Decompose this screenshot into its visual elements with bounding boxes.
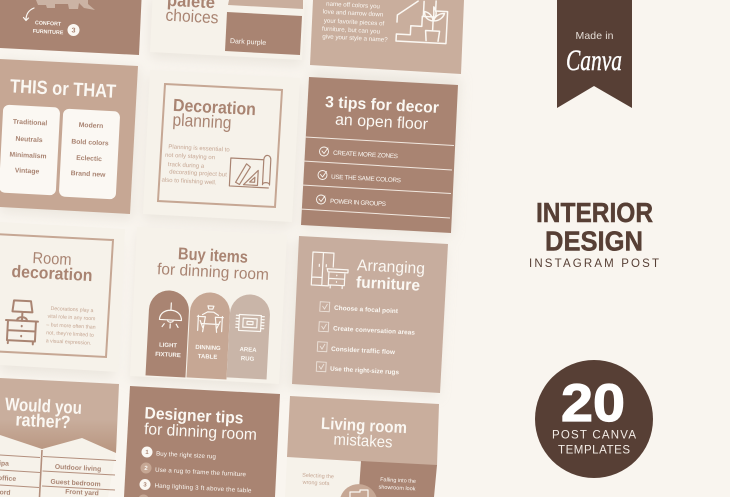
panel: designer tips: Use a rug to frame the furniture: [155, 467, 247, 478]
panel: designer tips: 1: [145, 450, 149, 456]
panel: buy items: RUG: [241, 356, 255, 363]
panel: designer tips: 3: [143, 482, 147, 489]
panel: room decoration: Decorations play a: [50, 306, 94, 314]
icon: blueprint and ruler: [229, 154, 271, 188]
icon: nightstand with lamp: [5, 300, 39, 345]
panel: arranging furniture: Choose a focal point: [334, 305, 399, 315]
heading: living room mistakes: Living room: [321, 415, 407, 437]
panel: this or that: [0, 59, 138, 214]
heading: room decoration: Room: [32, 250, 72, 269]
panel: buy items: TABLE: [198, 354, 217, 361]
panel: would you rather: rather?: [15, 410, 71, 432]
panel: 3 tips for decor: [300, 77, 458, 233]
icon: wardrobe and drawers: [311, 252, 349, 289]
badge: 20 post canva templates: POST CANVA: [552, 430, 636, 442]
heading: decoration planning: Decoration: [173, 95, 256, 119]
panel: 3 tips for decor: USE THE SAME COLORS: [331, 174, 401, 184]
panel: living room mistakes: showroom look: [378, 485, 416, 492]
panel: palette choices: Dark purple: [230, 38, 266, 47]
panel: room decoration: not, they're limited to: [46, 330, 94, 339]
ribbon: made in canva: [557, 0, 632, 108]
panel: 3 tips for decor: POWER IN GROUPS: [330, 198, 386, 208]
panel: comfort furniture card: CONFORT: [35, 20, 62, 28]
icon: rug: [236, 314, 264, 332]
icon: pendant lamp: [159, 302, 182, 329]
panel: room decoration: – but more often than: [46, 322, 96, 331]
title: interior design: INSTAGRAM POST: [529, 258, 659, 270]
panel: designer tips: Buy the right size rug: [156, 450, 217, 461]
panel: decoration planning: track during a: [168, 162, 205, 170]
panel: this or that: Eclectic: [76, 155, 102, 163]
panel: this or that: Bold colors: [71, 139, 109, 147]
panel: name your style: love and narrow down: [323, 8, 384, 19]
panel: decoration planning: not only staying on: [165, 153, 215, 161]
panel: would you rather: Guest bedroom: [50, 479, 101, 488]
panel: arranging furniture: [292, 236, 448, 393]
panel: buy items: [130, 227, 287, 384]
heading: buy items: Buy items: [178, 244, 248, 267]
panel: room decoration: vital role in any room: [47, 314, 96, 322]
panel: palette choices: choices: [165, 6, 219, 27]
panel: palette choices: [150, 0, 305, 60]
panel: buy items: AREA: [239, 347, 257, 354]
panel: living room mistakes: Falling into the: [380, 477, 416, 485]
badge: 20 post canva templates: 20: [561, 374, 625, 433]
panel: designer tips: for dinning room: [144, 421, 257, 444]
panel: name your style: name off colors you: [326, 1, 381, 10]
panel: comfort furniture card: 3: [71, 27, 76, 35]
heading: arranging furniture: Arranging: [357, 257, 425, 278]
panel: designer tips: [124, 386, 280, 497]
arch: area rug: [227, 294, 271, 379]
title: interior design: DESIGN: [545, 226, 643, 256]
panel: comfort furniture card: FURNITURE: [33, 29, 64, 36]
panel: living room mistakes: wrong sofa: [301, 480, 331, 487]
panel: this or that: Modern: [79, 122, 103, 130]
panel: designer tips: 2: [144, 466, 148, 472]
arch: dinning table: [186, 292, 231, 379]
icon: stairs with plant: [396, 0, 448, 44]
panel: would you rather: [0, 378, 119, 497]
panel: arranging furniture: furniture: [356, 274, 420, 295]
panel: name your style: furniture, but can you: [322, 25, 381, 36]
panel: this or that: Brand new: [70, 170, 106, 179]
panel: buy items: FIXTURE: [155, 352, 181, 359]
icon: dining table: [197, 305, 224, 333]
badge: 20 post canva templates: [535, 360, 653, 478]
panel: this or that: Vintage: [15, 167, 40, 176]
panel: name your style: your favorite pieces of: [324, 17, 385, 28]
ribbon: made in canva: Made in: [576, 30, 614, 42]
panel: arranging furniture: Create conversation areas: [333, 325, 416, 337]
heading: this or that: THIS or THAT: [10, 76, 117, 103]
panel: decoration planning: Planning is essential to: [168, 144, 230, 154]
heading: designer tips: Designer tips: [144, 404, 244, 428]
panel: name your style: give your style a name?: [322, 33, 388, 44]
panel: buy items: DINNING: [195, 345, 221, 352]
panel: decoration planning: planning: [172, 109, 232, 133]
panel: 3 tips for decor: CREATE MORE ZONES: [333, 150, 398, 160]
ribbon: made in canva: Canva: [566, 44, 622, 77]
heading: 3 tips for decor: 3 tips for decor: [325, 94, 439, 117]
panel: living room mistakes: [285, 396, 439, 497]
panel: this or that: Traditional: [13, 119, 47, 127]
panel: decoration planning: decorating project but: [169, 169, 227, 179]
panel: decoration planning: [143, 70, 300, 222]
panel: comfort furniture card: [0, 0, 142, 55]
panel: would you rather: Outdoor living: [55, 464, 101, 473]
badge: 20 post canva templates: TEMPLATES: [558, 444, 630, 456]
panel: 3 tips for decor: an open floor: [335, 112, 429, 133]
title: interior design: INTERIOR: [536, 197, 653, 228]
title: interior design: [529, 197, 659, 270]
panel: buy items: for dinning room: [157, 261, 269, 284]
panel: living room mistakes: mistakes: [333, 431, 393, 452]
panel: arranging furniture: Consider traffic flow: [331, 346, 395, 356]
panel: room decoration: [0, 222, 125, 372]
panel: this or that: Minimalism: [9, 152, 47, 160]
panel: this or that: Neutrals: [15, 136, 43, 144]
panel: room decoration: decoration: [11, 262, 93, 285]
panel: buy items: LIGHT: [159, 343, 177, 349]
panel: room decoration: a visual expression.: [46, 338, 91, 347]
arch: light fixture: [145, 290, 190, 377]
panel: designer tips: Hang lighting 3 ft above the table: [154, 482, 252, 495]
mosaic of template cards: [0, 0, 464, 497]
panel: decoration planning: also to finishing well.: [161, 178, 217, 186]
panel: living room mistakes: Selecting the: [302, 473, 334, 480]
heading: would you rather: Would you: [5, 394, 82, 418]
panel: arranging furniture: Use the right-size rugs: [330, 366, 400, 376]
panel: name your style: [310, 0, 464, 74]
